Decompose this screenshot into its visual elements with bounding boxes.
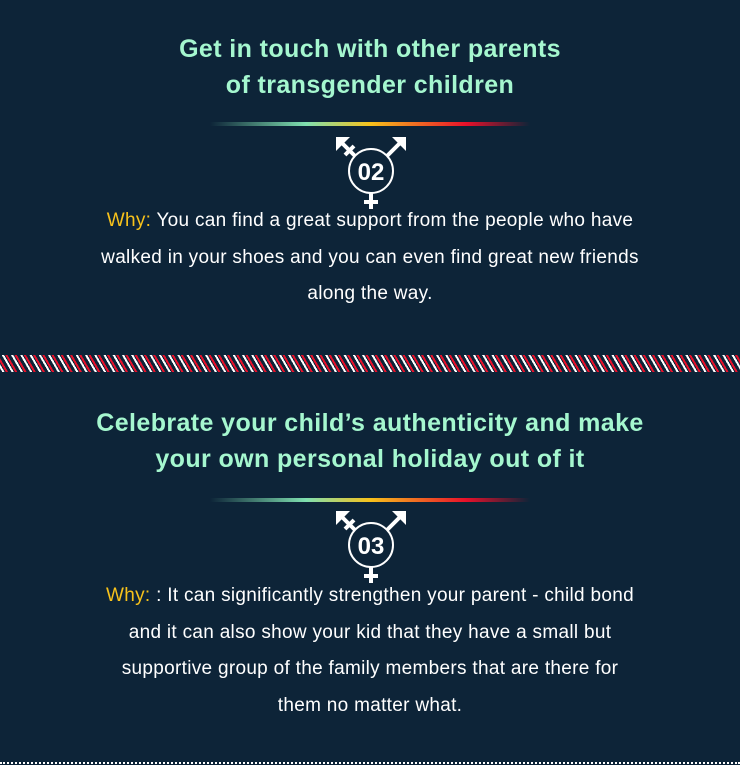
icon: transgender symbol 02 (336, 137, 406, 209)
body text 2: Why: : It can significantly strengthen your parent - child bond and it can also show your kid that they have a small but supportive group of the family members that are there for them no matter what. (106, 585, 634, 716)
body text 1: Why: You can find a great support from the people who have walked in your shoes and you can even find great new friends along the way. (101, 210, 639, 304)
title 2: your own personal holiday out of it (155, 445, 585, 473)
divider 2 (214, 498, 528, 502)
title 2 (96, 409, 644, 473)
title 1: of transgender children (226, 71, 514, 99)
striped band (0, 355, 740, 372)
divider 1 (214, 122, 528, 126)
icon: transgender symbol 03 (336, 511, 406, 583)
icon: transgender symbol 03: 03 (358, 533, 384, 560)
bottom dotted line (0, 762, 740, 764)
title 2: Celebrate your child’s authenticity and make (96, 409, 644, 437)
title 1: Get in touch with other parents (179, 35, 561, 63)
title 1 (179, 35, 561, 99)
icon: transgender symbol 02: 02 (358, 159, 384, 186)
